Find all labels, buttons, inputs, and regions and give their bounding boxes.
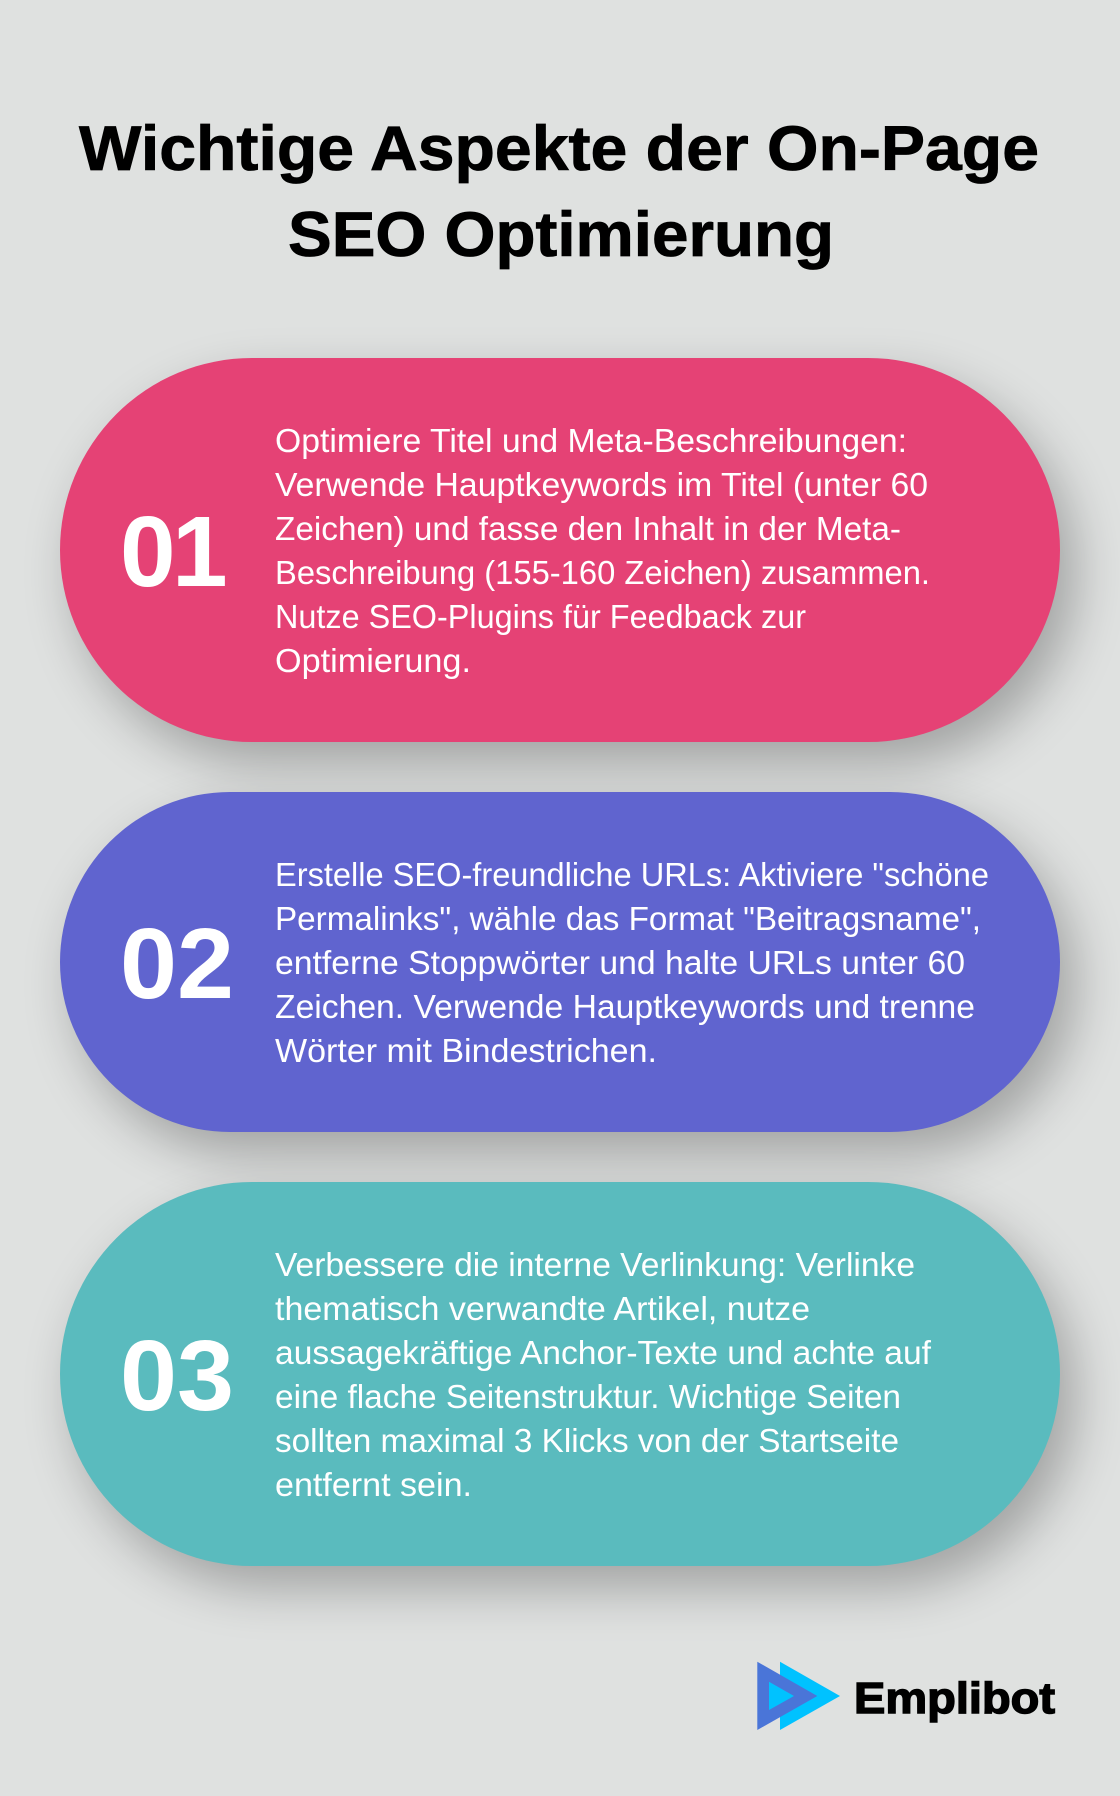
- number 03: 03: [120, 1320, 234, 1432]
- title: [78, 114, 1039, 270]
- text block: internal linking: aussagekräftige Anchor-Texte und achte auf: [275, 1334, 932, 1371]
- text block: titles and meta descriptions: Optimierung.: [275, 642, 471, 679]
- number 01: 01: [120, 496, 228, 608]
- text block: titles and meta descriptions: Zeichen) und fasse den Inhalt in der Meta-: [275, 510, 901, 547]
- number 02: 02: [120, 908, 234, 1020]
- text block: SEO-friendly URLs: Zeichen. Verwende Hauptkeywords und trenne: [275, 988, 975, 1025]
- logo: Emplibot: [757, 1662, 1056, 1730]
- text block: SEO-friendly URLs: Wörter mit Bindestrichen.: [275, 1032, 657, 1069]
- text block: titles and meta descriptions: Beschreibung (155-160 Zeichen) zusammen.: [275, 554, 930, 591]
- text block: SEO-friendly URLs: Permalinks", wähle das Format "Beitragsname",: [275, 900, 981, 937]
- text block: internal linking: thematisch verwandte Artikel, nutze: [275, 1290, 810, 1327]
- panel: step 02: [60, 792, 1060, 1132]
- text block: titles and meta descriptions: Verwende Hauptkeywords im Titel (unter 60: [275, 466, 928, 503]
- text block: SEO-friendly URLs: [275, 856, 989, 1069]
- text block: titles and meta descriptions: Nutze SEO-Plugins für Feedback zur: [275, 598, 806, 635]
- text block: internal linking: [275, 1246, 932, 1503]
- title: Wichtige Aspekte der On-Page: [79, 114, 1039, 184]
- text block: internal linking: eine flache Seitenstruktur. Wichtige Seiten: [275, 1378, 901, 1415]
- icon: play triangles: [757, 1662, 840, 1730]
- title: SEO Optimierung: [288, 200, 834, 270]
- text block: internal linking: Verbessere die interne Verlinkung: Verlinke: [275, 1246, 915, 1283]
- text block: internal linking: entfernt sein.: [275, 1466, 472, 1503]
- text block: SEO-friendly URLs: Erstelle SEO-freundliche URLs: Aktiviere "schöne: [275, 856, 989, 893]
- text block: titles and meta descriptions: [275, 422, 930, 679]
- panel: step 03: [60, 1182, 1060, 1566]
- logo wordmark: Emplibot: [854, 1674, 1055, 1723]
- text block: SEO-friendly URLs: entferne Stoppwörter und halte URLs unter 60: [275, 944, 965, 981]
- panel: step 01: [60, 358, 1060, 742]
- text block: internal linking: sollten maximal 3 Klicks von der Startseite: [275, 1422, 899, 1459]
- text block: titles and meta descriptions: Optimiere Titel und Meta-Beschreibungen:: [275, 422, 907, 459]
